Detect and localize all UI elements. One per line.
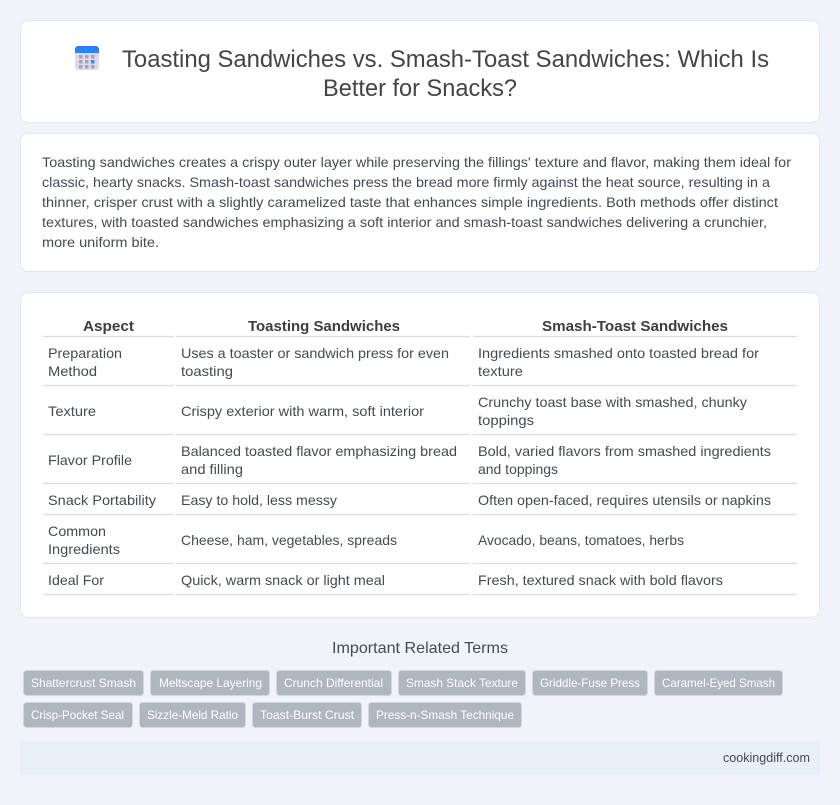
row: ideal for: Fresh, textured snack with bold flavors [478, 572, 723, 588]
tag list: related terms [24, 670, 782, 728]
footer [20, 741, 820, 775]
table header [83, 318, 728, 335]
row: ideal for [48, 572, 723, 588]
row: common ingredients: Ingredients [48, 541, 120, 557]
tag list: related terms: Crunch Differential [284, 676, 383, 690]
icon: calendar [75, 46, 99, 70]
title: Better for Snacks? [323, 75, 517, 102]
tag list: related terms: Caramel-Eyed Smash [662, 676, 775, 690]
text block: introduction: Toasting sandwiches creates a crispy outer layer while preserving the fillings' texture and flavor, making them ideal for [42, 154, 791, 170]
text block: introduction: textures, with toasted sandwiches emphasizing a soft interior and smash-toast sandwiches delivering a crunchier, [42, 214, 767, 230]
panel: title card [20, 20, 820, 122]
row: preparation method: Uses a toaster or sandwich press for even [181, 345, 449, 361]
row: flavor profile [48, 443, 771, 477]
tag list: related terms: Smash Stack Texture [406, 676, 518, 690]
footer: cookingdiff.com [723, 751, 810, 765]
text block: introduction [42, 154, 791, 250]
row: snack portability: Snack Portability [48, 492, 156, 508]
row: preparation method: Method [48, 363, 97, 379]
text block: introduction: thinner, crisper crust with a slightly caramelized taste that enhances simple ingredients. Both methods offer distinct [42, 194, 778, 210]
row: flavor profile: Bold, varied flavors from smashed ingredients [478, 443, 771, 459]
panel: comparison table [20, 292, 820, 618]
row: preparation method: Preparation [48, 345, 122, 361]
tag list: related terms: Griddle-Fuse Press [540, 676, 640, 690]
row: texture: Crunchy toast base with smashed, chunky [478, 394, 747, 410]
row: texture: toppings [478, 412, 534, 428]
text block: introduction: more uniform bite. [42, 234, 159, 250]
tag list: related terms: Sizzle-Meld Ratio [147, 708, 238, 722]
row: common ingredients: Avocado, beans, tomatoes, herbs [478, 532, 684, 548]
row: common ingredients: Cheese, ham, vegetables, spreads [181, 532, 397, 548]
row: texture: Crispy exterior with warm, soft interior [181, 403, 424, 419]
heading: related terms: Important Related Terms [332, 640, 508, 657]
row: ideal for: Quick, warm snack or light meal [181, 572, 385, 588]
panel: introduction [20, 134, 820, 272]
row: flavor profile: Flavor Profile [48, 452, 132, 468]
table header: Smash-Toast Sandwiches [542, 318, 728, 335]
row: flavor profile: and filling [181, 461, 243, 477]
row: common ingredients: Common [48, 523, 106, 539]
row: snack portability: Often open-faced, requires utensils or napkins [478, 492, 771, 508]
tag list: related terms: Press-n-Smash Technique [376, 708, 514, 722]
row: flavor profile: Balanced toasted flavor emphasizing bread [181, 443, 457, 459]
row: ideal for: Ideal For [48, 572, 104, 588]
table header: Toasting Sandwiches [248, 318, 400, 335]
tag list: related terms: Toast-Burst Crust [260, 708, 355, 722]
row: preparation method [48, 345, 759, 379]
tag list: related terms: Meltscape Layering [159, 676, 262, 690]
row: texture [48, 394, 747, 428]
tag list: related terms: Crisp-Pocket Seal [31, 708, 124, 722]
text block: introduction: classic, hearty snacks. Smash-toast sandwiches press the bread more firmly against the heat source, resulting in a [42, 174, 770, 190]
row: texture: Texture [48, 403, 96, 419]
title: Toasting Sandwiches vs. Smash-Toast Sandwiches: Which Is [122, 46, 769, 73]
tag list: related terms: Shattercrust Smash [31, 676, 136, 690]
row: preparation method: toasting [181, 363, 233, 379]
title [122, 46, 769, 102]
row: flavor profile: and toppings [478, 461, 558, 477]
row: snack portability: Easy to hold, less messy [181, 492, 337, 508]
row: preparation method: Ingredients smashed onto toasted bread for [478, 345, 759, 361]
row: common ingredients [48, 523, 684, 557]
table header: Aspect [83, 318, 134, 335]
row: preparation method: texture [478, 363, 523, 379]
row: snack portability [48, 492, 771, 508]
